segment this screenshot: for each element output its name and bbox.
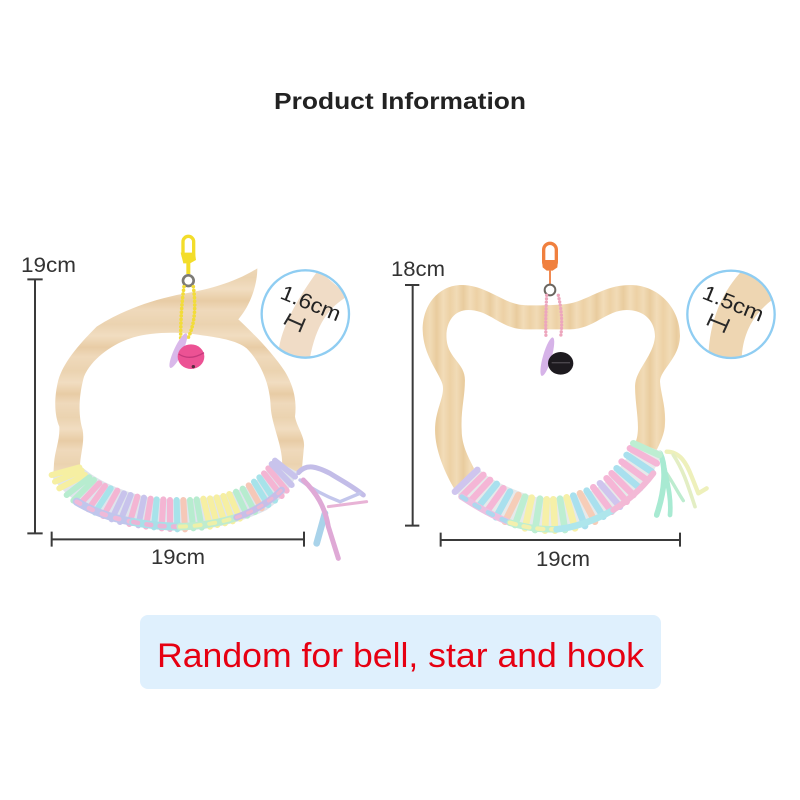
black bell: [548, 352, 573, 375]
hanging hook, chain and bell: [538, 243, 573, 377]
yellow clasp: [183, 236, 194, 260]
width measure: [52, 532, 304, 547]
woven rope wrap: [453, 442, 662, 532]
woven rope wrap: [50, 460, 297, 530]
label: right height: 18cm: [391, 258, 445, 281]
pink bell: [178, 344, 204, 369]
thickness inset: [687, 269, 777, 362]
star charm: [538, 336, 557, 377]
orange clasp: [544, 243, 556, 268]
thickness inset: [262, 270, 349, 362]
height measure: [405, 285, 419, 526]
wooden ring: [53, 268, 304, 475]
star charm: [166, 332, 190, 370]
height measure: [27, 279, 43, 533]
product: left fish-shaped ring: [27, 236, 367, 558]
callout banner: [140, 615, 661, 689]
rope tassel: [298, 467, 367, 558]
rope tassel: [657, 452, 707, 515]
callout text: Random for bell, star and hook: [157, 637, 645, 675]
title: Product Information: [274, 88, 526, 114]
label: left height: 19cm: [21, 254, 76, 277]
product: right bear-shaped ring: [405, 243, 777, 547]
label: right thickness: 1.5cm: [699, 281, 767, 327]
label: left thickness: 1.6cm: [277, 281, 344, 326]
width measure: [441, 533, 680, 547]
label: right width: 19cm: [536, 548, 590, 571]
wooden ring: [423, 285, 680, 490]
label: left width: 19cm: [151, 546, 205, 569]
hanging hook, chain and bell: [166, 236, 204, 370]
infographic canvas: [22, 92, 776, 689]
